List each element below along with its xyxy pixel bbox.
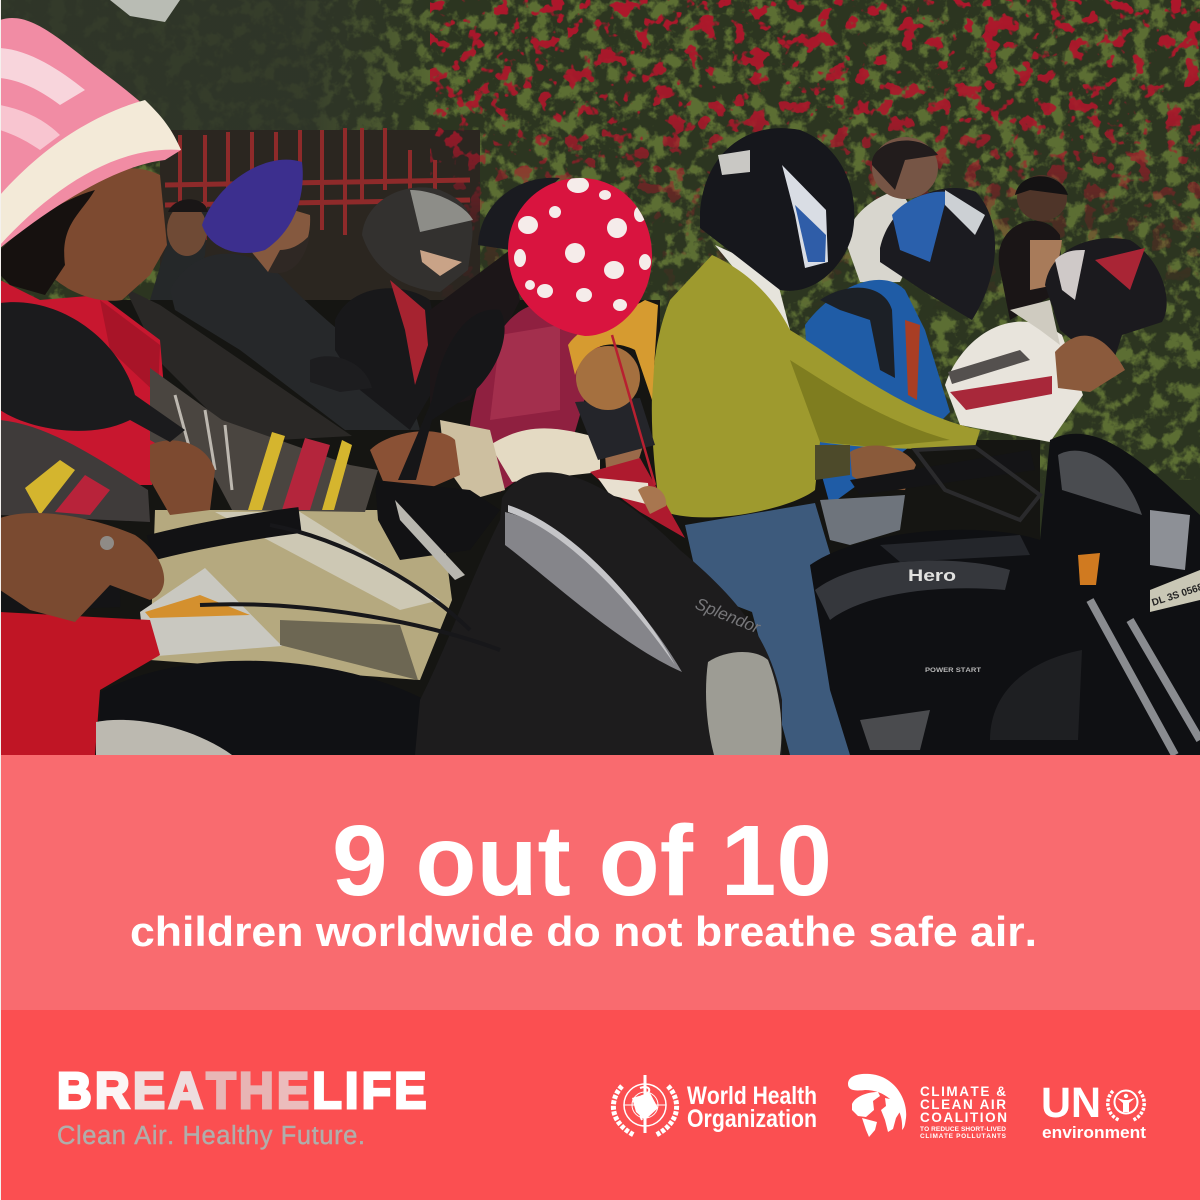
text: Climate and Clean Air Coalition: [920, 1084, 1007, 1140]
text: Climate and Clean Air Coalition: CLIMATE POLLUTANTS: [920, 1133, 1007, 1140]
right motorcycle: Hero: [908, 567, 956, 585]
text: Climate and Clean Air Coalition: CLEAN AIR: [920, 1097, 1006, 1112]
icon: WHO emblem: [613, 1075, 677, 1135]
man with blue turban: [170, 160, 420, 430]
striped-shirt rider and helmet: [945, 238, 1167, 442]
icon: UN Environment emblem: [1108, 1090, 1144, 1120]
left mirror: [0, 302, 185, 442]
panel: headline band: [0, 755, 1200, 1010]
red cloth at lower left: [0, 612, 160, 755]
logo: Climate and Clean Air Coalition: [848, 1074, 1007, 1140]
photo: motorbike riders and a child with a balloon in traffic: [0, 0, 1200, 755]
text: World Health Organization: Organization: [687, 1105, 817, 1133]
foreground motorcycle tank and headlight: Splendor: [693, 594, 764, 638]
logo: World Health Organization: [613, 1075, 817, 1135]
text: Climate and Clean Air Coalition: TO REDUCE SHORT-LIVED: [920, 1126, 1006, 1133]
center mirror and controls: [310, 310, 505, 580]
text: environment: environment: [1042, 1123, 1146, 1142]
background people: [150, 137, 1068, 320]
subheading: children worldwide do not breathe safe air.: [130, 908, 1037, 955]
text: World Health Organization: World Health: [687, 1082, 817, 1110]
striped sleeve and hands on handlebar: [0, 368, 460, 522]
woman in maroon sweater: [440, 303, 648, 500]
rider in grey helmet: [335, 187, 473, 430]
logo: UN Environment: [1041, 1079, 1146, 1142]
foreground motorcycle tank and headlight: [96, 472, 782, 755]
right motorcycle: POWER START: [925, 667, 981, 674]
child with pink knit hat in red top: [0, 18, 181, 485]
large dark windshield: [125, 288, 352, 442]
BreatheLife wordmark: BREATHELIFE: [57, 1063, 430, 1119]
hand on lower left grip: [0, 513, 164, 622]
text: World Health Organization: [687, 1082, 817, 1133]
headline: 9 out of 10: 9 out of 10: [332, 805, 832, 917]
panel: footer with logos: [0, 1010, 1200, 1200]
red iron fence: [165, 128, 470, 240]
right motorcycle: [810, 434, 1200, 755]
left edge line: [0, 0, 1, 1200]
olive-sweater rider with helmet and jeans: [652, 128, 980, 755]
ring: [100, 536, 114, 550]
beige car with headlight: [140, 510, 452, 680]
blue-jacket rider and helmet: [805, 188, 995, 505]
red polka-dot balloon: [508, 177, 655, 485]
background: trees and hedge: [0, 0, 1200, 755]
tagline: Clean Air. Healthy Future.: [57, 1122, 365, 1150]
child in tiger hat: [568, 300, 685, 538]
handlebars and cables: [154, 507, 456, 634]
text: Climate and Clean Air Coalition: COALITION: [920, 1110, 1007, 1125]
text: Climate and Clean Air Coalition: CLIMATE &: [920, 1084, 1006, 1099]
text: UN: UN: [1041, 1079, 1101, 1127]
icon: CCAC globe with swoosh: [848, 1074, 906, 1137]
second rider helmet behind balloon: [444, 178, 560, 300]
